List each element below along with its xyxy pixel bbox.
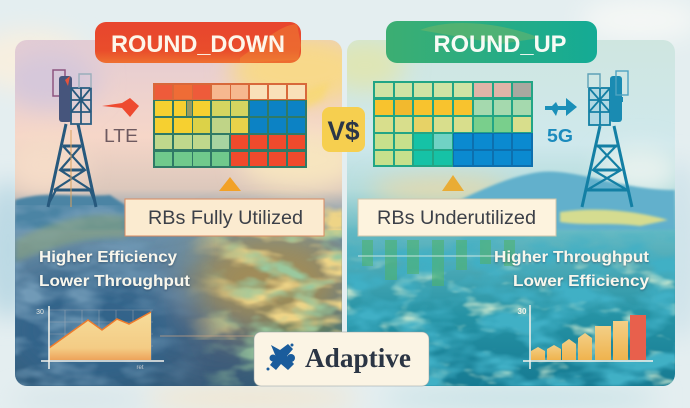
- chart: left area chart: ret: [136, 365, 144, 371]
- label: LTE: LTE: [104, 125, 138, 146]
- badge: Adaptive: Adaptive: [305, 343, 411, 373]
- icon: right pointer triangle: [442, 175, 464, 191]
- panel: round down background: [15, 40, 342, 386]
- text: right trade-off: [494, 249, 649, 290]
- panel: round up background: [325, 39, 680, 386]
- icon: LTE tower: [48, 70, 96, 207]
- label: 5G: 5G: [547, 125, 573, 146]
- text: left trade-off: [39, 249, 190, 290]
- callout: RBs Fully Utilized: [125, 199, 324, 236]
- chart: round down resource block grid: [153, 83, 307, 168]
- distant hills right: [450, 172, 675, 230]
- icon: Adaptive logo: [266, 344, 295, 370]
- callout: RBs Fully Utilized: RBs Fully Utilized: [148, 208, 303, 229]
- text: left trade-off: Higher Efficiency: [39, 249, 177, 266]
- icon: 5G arrow: [545, 98, 577, 116]
- chart: left area chart: [36, 306, 164, 371]
- distant hills left: [15, 195, 125, 230]
- ghost bars: [362, 240, 515, 286]
- badge: Adaptive: [254, 332, 429, 386]
- chart: round up resource block grid: [373, 81, 533, 167]
- text: left trade-off: Lower Throughput: [39, 273, 190, 290]
- callout: RBs Underutilized: [358, 199, 556, 236]
- text: right trade-off: Higher Throughput: [494, 249, 649, 266]
- icon: 5G tower: [582, 71, 632, 207]
- icon: LTE arrow: [102, 98, 139, 117]
- chart: right bar chart: 30: [518, 307, 527, 316]
- title: ROUND_UP: [386, 21, 597, 63]
- icon: VS badge: [322, 107, 365, 152]
- icon: left pointer triangle: [219, 177, 241, 191]
- icon: VS badge: V$: [328, 116, 360, 146]
- title: ROUND_DOWN: ROUND_DOWN: [111, 31, 285, 58]
- chart: right bar chart: [518, 305, 653, 369]
- text: right trade-off: Lower Efficiency: [513, 273, 649, 290]
- title: ROUND_DOWN: [95, 22, 301, 63]
- title: ROUND_UP: ROUND_UP: [434, 31, 566, 58]
- callout: RBs Underutilized: RBs Underutilized: [377, 208, 536, 229]
- chart: left area chart: 30: [36, 309, 44, 316]
